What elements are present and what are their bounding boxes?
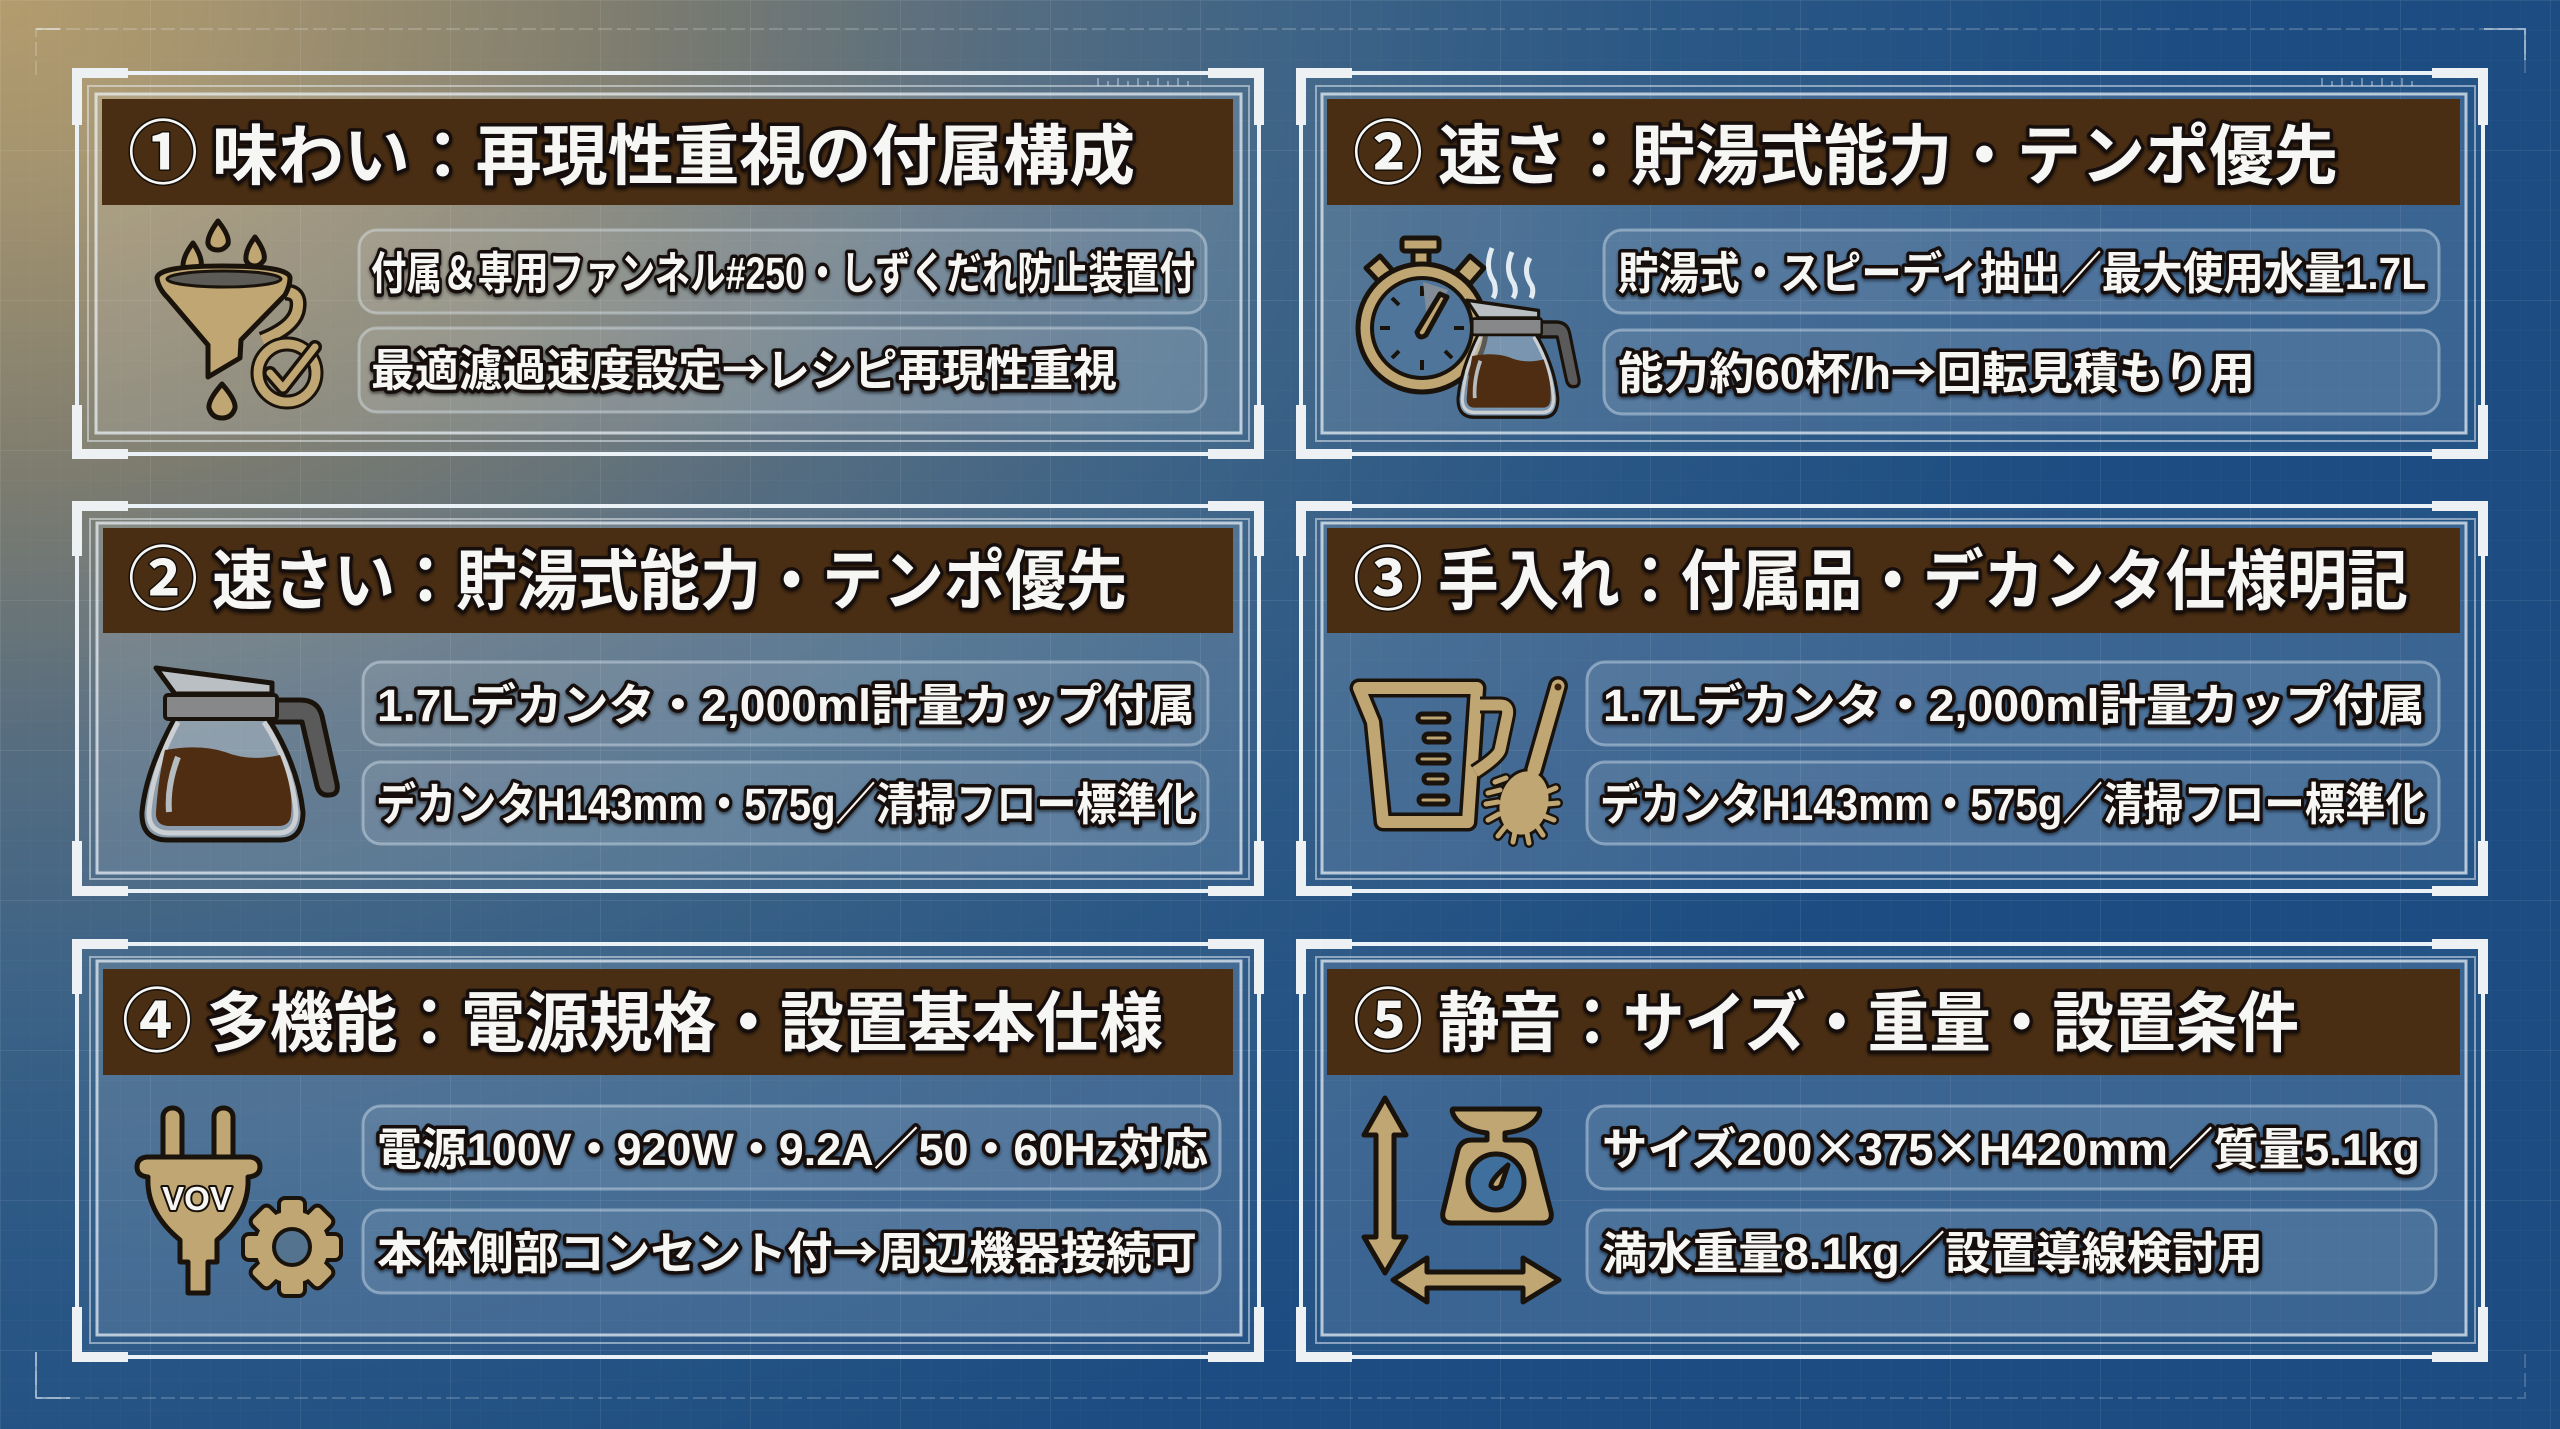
heading number: ②: [128, 541, 198, 619]
icon: measuring cup and brush: [1359, 684, 1562, 843]
pill: filtration speed: [359, 328, 1206, 412]
pill: accessories: [363, 662, 1208, 745]
icon: dimensions and scale: [1364, 1098, 1559, 1302]
heading number: ①: [128, 115, 198, 193]
pill: power: 電源100V・920W・9.2A／50・60Hz対応: [377, 1124, 1208, 1175]
pill: funnel spec: [359, 230, 1206, 313]
heading bar: [102, 99, 1233, 205]
pill: capacity: [1604, 330, 2439, 414]
pill: storage type: [1604, 230, 2439, 313]
heading number: ③: [1353, 541, 1423, 619]
panel: 静音: [1301, 944, 2483, 1357]
heading text: 味わい：再現性重視の付属構成: [212, 119, 1135, 193]
icon: carafe: [142, 668, 337, 840]
panel: 速さ: [1301, 73, 2483, 454]
pill: weight: [1587, 1210, 2436, 1293]
heading text: 静音：サイズ・重量・設置条件: [1438, 986, 2299, 1060]
pill: decanter: [1587, 762, 2439, 844]
pill: power: [363, 1106, 1220, 1189]
panel: 多機能: [77, 944, 1259, 1357]
pill: weight: 満水重量8.1kg／設置導線検討用: [1602, 1228, 2263, 1279]
heading text: 速さい：貯湯式能力・テンポ優先: [212, 544, 1127, 618]
panel: 手入れ: [1301, 506, 2483, 891]
pill: outlet: 本体側部コンセント付→周辺機器接続可: [377, 1217, 1197, 1282]
icon: plug and gear: [137, 1108, 339, 1294]
heading bar: [1327, 528, 2460, 633]
panel: 速さい: [77, 506, 1259, 891]
pill: decanter: デカンタH143mm・575g／清掃フロー標準化: [1600, 779, 2426, 830]
heading bar: [103, 528, 1233, 633]
pill: capacity: 能力約60杯/h→回転見積もり用: [1618, 337, 2255, 402]
pill: storage type: 貯湯式・スピーディ抽出／最大使用水量1.7L: [1618, 248, 2426, 299]
heading number: ⑤: [1353, 983, 1423, 1061]
heading number: ④: [122, 983, 192, 1061]
pill: filtration speed: 最適濾過速度設定→レシピ再現性重視: [371, 334, 1117, 399]
heading number: ②: [1353, 115, 1423, 193]
heading text: 手入れ：付属品・デカンタ仕様明記: [1438, 544, 2408, 618]
heading text: 速さ：貯湯式能力・テンポ優先: [1438, 119, 2338, 193]
pill: decanter: デカンタH143mm・575g／清掃フロー標準化: [376, 779, 1197, 830]
pill: funnel spec: 付属＆専用ファンネル#250・しずくだれ防止装置付: [371, 248, 1195, 299]
pill: accessories: [1587, 662, 2439, 745]
panel: 味わい: [77, 73, 1259, 454]
icon: stopwatch and carafe: [1358, 238, 1579, 417]
heading text: 多機能：電源規格・設置基本仕様: [206, 986, 1163, 1060]
pill: size: サイズ200×375×H420mm／質量5.1kg: [1602, 1113, 2420, 1178]
heading bar: [1327, 99, 2460, 205]
pill: accessories: 1.7Lデカンタ・2,000ml計量カップ付属: [1603, 680, 2425, 731]
heading bar: [103, 969, 1233, 1075]
icon text: VOV: VOV: [162, 1180, 232, 1217]
icon: funnel with drops and check: [157, 221, 316, 418]
pill: accessories: 1.7Lデカンタ・2,000ml計量カップ付属: [377, 680, 1195, 731]
heading bar: [1327, 969, 2460, 1075]
pill: decanter: [363, 762, 1208, 844]
